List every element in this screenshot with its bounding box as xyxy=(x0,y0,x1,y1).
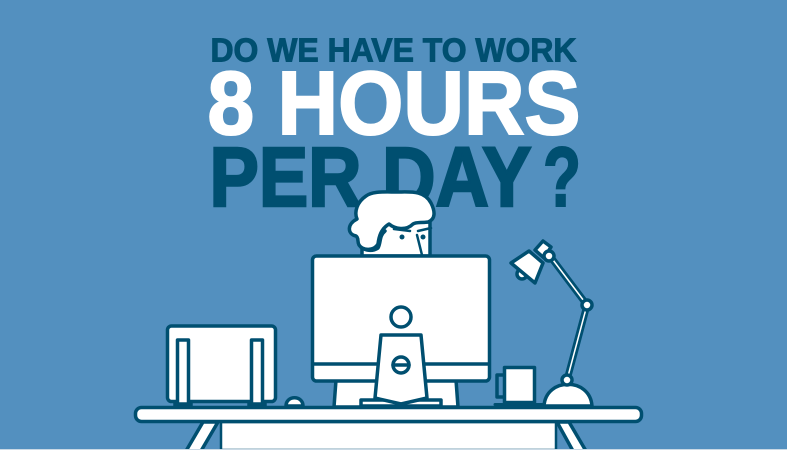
stand hole xyxy=(393,357,409,373)
title line 3: PER DAY xyxy=(210,130,532,224)
illustration: person at desk xyxy=(136,192,642,450)
chin line xyxy=(313,362,489,366)
eyes xyxy=(400,234,426,240)
right slot xyxy=(252,340,262,404)
desk leg right xyxy=(557,422,586,450)
cup xyxy=(504,368,534,402)
logo circle xyxy=(391,307,411,327)
desk leg left xyxy=(186,422,218,450)
neck xyxy=(535,241,551,258)
monitor neck xyxy=(334,380,458,407)
desk panel xyxy=(221,422,556,450)
body xyxy=(168,326,276,402)
mouse xyxy=(286,398,303,406)
saucer xyxy=(495,403,544,406)
eyebrows xyxy=(394,228,431,231)
bulb xyxy=(517,269,527,279)
person head xyxy=(349,192,434,256)
dome base xyxy=(544,384,592,406)
lamp xyxy=(511,241,592,406)
title line 2: 8 HOURS xyxy=(208,54,580,154)
upper arm xyxy=(550,256,587,305)
title line 1: DO WE HAVE TO WORK xyxy=(210,32,576,70)
joints xyxy=(544,251,554,261)
feet xyxy=(175,403,265,406)
question mark: ? xyxy=(543,130,581,224)
hair xyxy=(349,192,434,249)
lower arm xyxy=(567,305,587,380)
stand xyxy=(375,335,427,404)
face xyxy=(362,222,430,256)
stand base xyxy=(361,400,441,406)
title xyxy=(208,32,581,224)
mug xyxy=(495,368,544,404)
desk top xyxy=(136,408,642,422)
handle xyxy=(497,375,504,397)
ear curl xyxy=(360,231,385,250)
left slot xyxy=(178,340,188,404)
shade xyxy=(511,251,543,283)
nose line xyxy=(417,235,422,255)
laptop box xyxy=(168,326,276,406)
screen back xyxy=(312,256,490,381)
monitor xyxy=(312,256,490,381)
